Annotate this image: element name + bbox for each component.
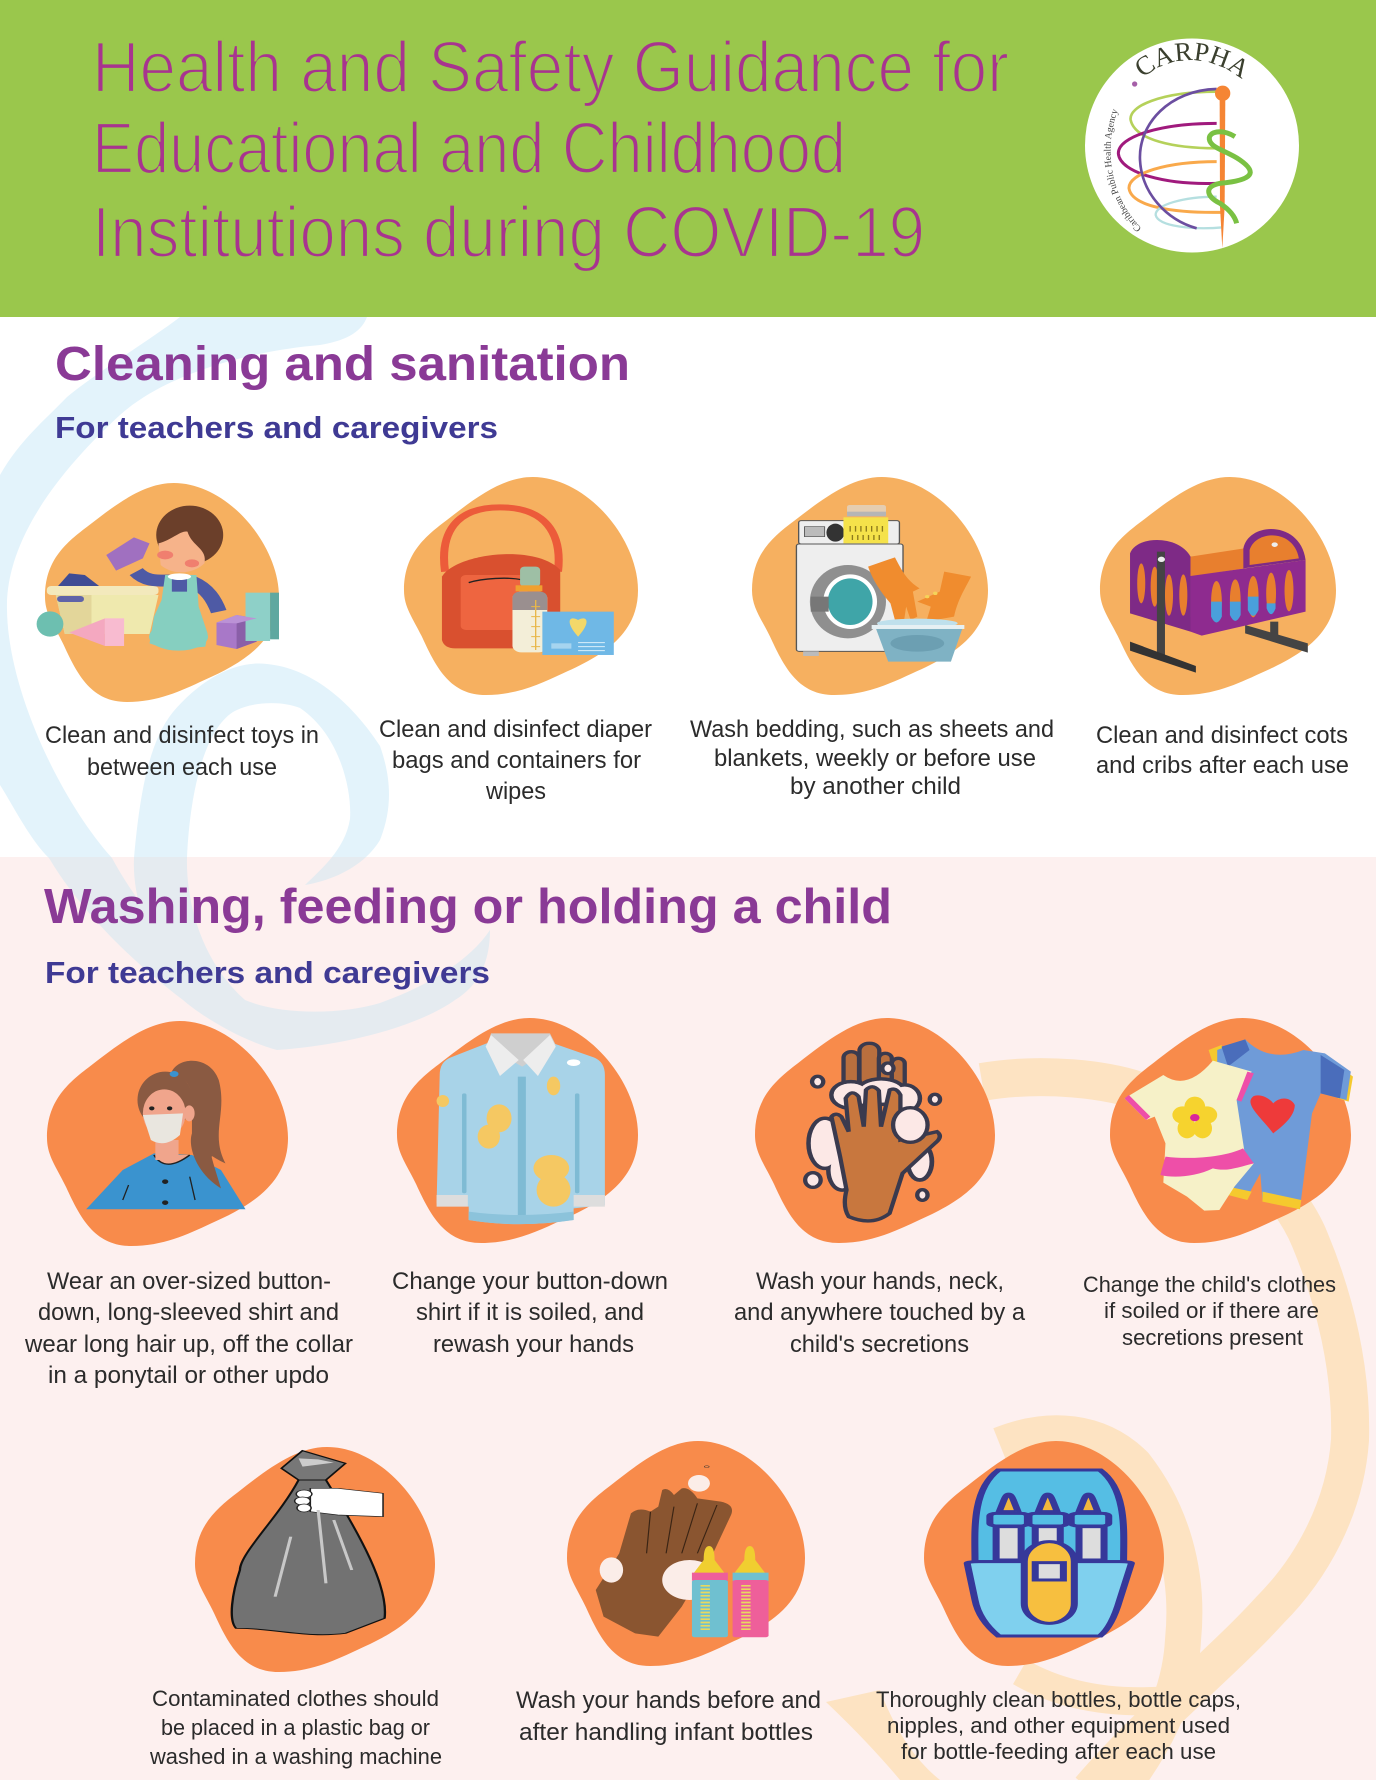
blob xyxy=(195,1447,435,1672)
logo: CARPHA: CARPHA xyxy=(1136,42,1244,79)
caption xyxy=(24,1268,353,1389)
caption xyxy=(149,1686,442,1769)
caption: Change your button-down xyxy=(392,1268,668,1295)
caption: wipes xyxy=(485,778,546,805)
caption: if soiled or if there are xyxy=(1104,1298,1319,1323)
caption: wear long hair up, off the collar xyxy=(24,1331,353,1358)
caption: rewash your hands xyxy=(433,1331,634,1358)
caption: child's secretions xyxy=(790,1331,969,1358)
caption: between each use xyxy=(87,754,277,781)
caption: after handling infant bottles xyxy=(519,1719,813,1746)
title: Educational and Childhood xyxy=(92,109,846,189)
caption xyxy=(1083,1272,1336,1350)
caption: Wash your hands, neck, xyxy=(756,1268,1004,1295)
icon: baby clothes xyxy=(1125,1039,1353,1211)
caption: Contaminated clothes should xyxy=(152,1686,439,1711)
caption xyxy=(876,1687,1241,1764)
caption: and cribs after each use xyxy=(1096,752,1349,779)
caption xyxy=(1096,722,1349,779)
item: wash hands and neck xyxy=(734,1018,1026,1358)
subheading: for teachers and caregivers: For teachers and caregivers xyxy=(55,410,498,445)
item: clean bottles xyxy=(876,1441,1241,1764)
blob xyxy=(567,1441,805,1666)
item: clean toys xyxy=(37,483,319,781)
icon: hands and infant bottles xyxy=(596,1466,769,1637)
caption: blankets, weekly or before use xyxy=(714,745,1036,772)
subheading: for teachers and caregivers: For teachers and caregivers xyxy=(45,955,490,990)
blob xyxy=(47,1021,288,1246)
icon: soiled button-down shirt xyxy=(437,1033,605,1224)
blob xyxy=(1100,477,1336,695)
icon: woman with mask and ponytail xyxy=(86,1061,246,1209)
caption: in a ponytail or other updo xyxy=(48,1362,329,1389)
icon: crib xyxy=(1130,529,1308,673)
heading: cleaning and sanitation: Cleaning and sanitation xyxy=(55,338,630,391)
section background: washing, feeding or holding a child xyxy=(0,857,1376,1780)
icon: bottle steriliser xyxy=(967,1470,1131,1636)
heading: washing, feeding or holding a child: Washing, feeding or holding a child xyxy=(44,880,892,934)
caption: bags and containers for xyxy=(392,747,641,774)
caption: by another child xyxy=(790,773,961,800)
item: clean diaper bags xyxy=(379,477,652,805)
logo: CARPHA xyxy=(1085,38,1299,252)
blob xyxy=(45,483,279,702)
caption: Wash your hands before and xyxy=(516,1687,821,1714)
item: wash hands for bottles xyxy=(516,1441,821,1746)
background swirl: blue over pink section xyxy=(48,857,490,1050)
title: Health and Safety Guidance for xyxy=(92,28,1009,108)
icon: plastic bag held by hand xyxy=(232,1451,385,1635)
icon: child with toys xyxy=(37,506,279,651)
caption xyxy=(379,716,652,805)
caption: washed in a washing machine xyxy=(149,1744,442,1769)
title xyxy=(92,28,1009,273)
title: Institutions during COVID-19 xyxy=(92,193,925,273)
icon: washing machine and gloves xyxy=(796,505,971,662)
item: contaminated clothes xyxy=(149,1447,442,1769)
item: clean cots and cribs xyxy=(1096,477,1349,779)
caption xyxy=(690,716,1054,800)
caption xyxy=(516,1687,821,1746)
icon: diaper bag, bottle and wipes xyxy=(442,507,614,655)
caption: Clean and disinfect toys in xyxy=(45,722,319,749)
blob xyxy=(404,477,638,695)
caption: Change the child's clothes xyxy=(1083,1272,1336,1297)
caption xyxy=(45,722,319,781)
background swirl: blue xyxy=(0,317,490,1050)
caption: secretions present xyxy=(1122,1325,1304,1350)
caption xyxy=(734,1268,1026,1358)
caption: for bottle-feeding after each use xyxy=(901,1739,1216,1764)
caption xyxy=(392,1268,668,1358)
caption: nipples, and other equipment used xyxy=(887,1713,1230,1738)
blob xyxy=(1110,1018,1351,1243)
header banner xyxy=(0,0,1376,317)
caption: Clean and disinfect diaper xyxy=(379,716,652,743)
caption: shirt if it is soiled, and xyxy=(416,1299,644,1326)
background swirl: peach xyxy=(826,1077,1350,1780)
caption: Wash bedding, such as sheets and xyxy=(690,716,1054,743)
blob xyxy=(755,1018,995,1243)
caption: Thoroughly clean bottles, bottle caps, xyxy=(876,1687,1241,1712)
item: wear button-down shirt and hair up xyxy=(24,1021,353,1389)
logo: CARPHA: Caribbean Public Health Agency xyxy=(1104,108,1140,232)
caption: Wear an over-sized button- xyxy=(47,1268,331,1295)
item: change soiled shirt xyxy=(392,1018,668,1358)
caption: and anywhere touched by a xyxy=(734,1299,1026,1326)
blob xyxy=(397,1018,638,1243)
caption: Clean and disinfect cots xyxy=(1096,722,1348,749)
blob xyxy=(924,1441,1164,1666)
item: wash bedding xyxy=(690,477,1054,800)
item: change child's clothes xyxy=(1083,1018,1353,1350)
icon: soapy hands xyxy=(805,1043,940,1221)
blob xyxy=(752,477,988,695)
caption: down, long-sleeved shirt and xyxy=(38,1299,339,1326)
caption: be placed in a plastic bag or xyxy=(161,1715,430,1740)
